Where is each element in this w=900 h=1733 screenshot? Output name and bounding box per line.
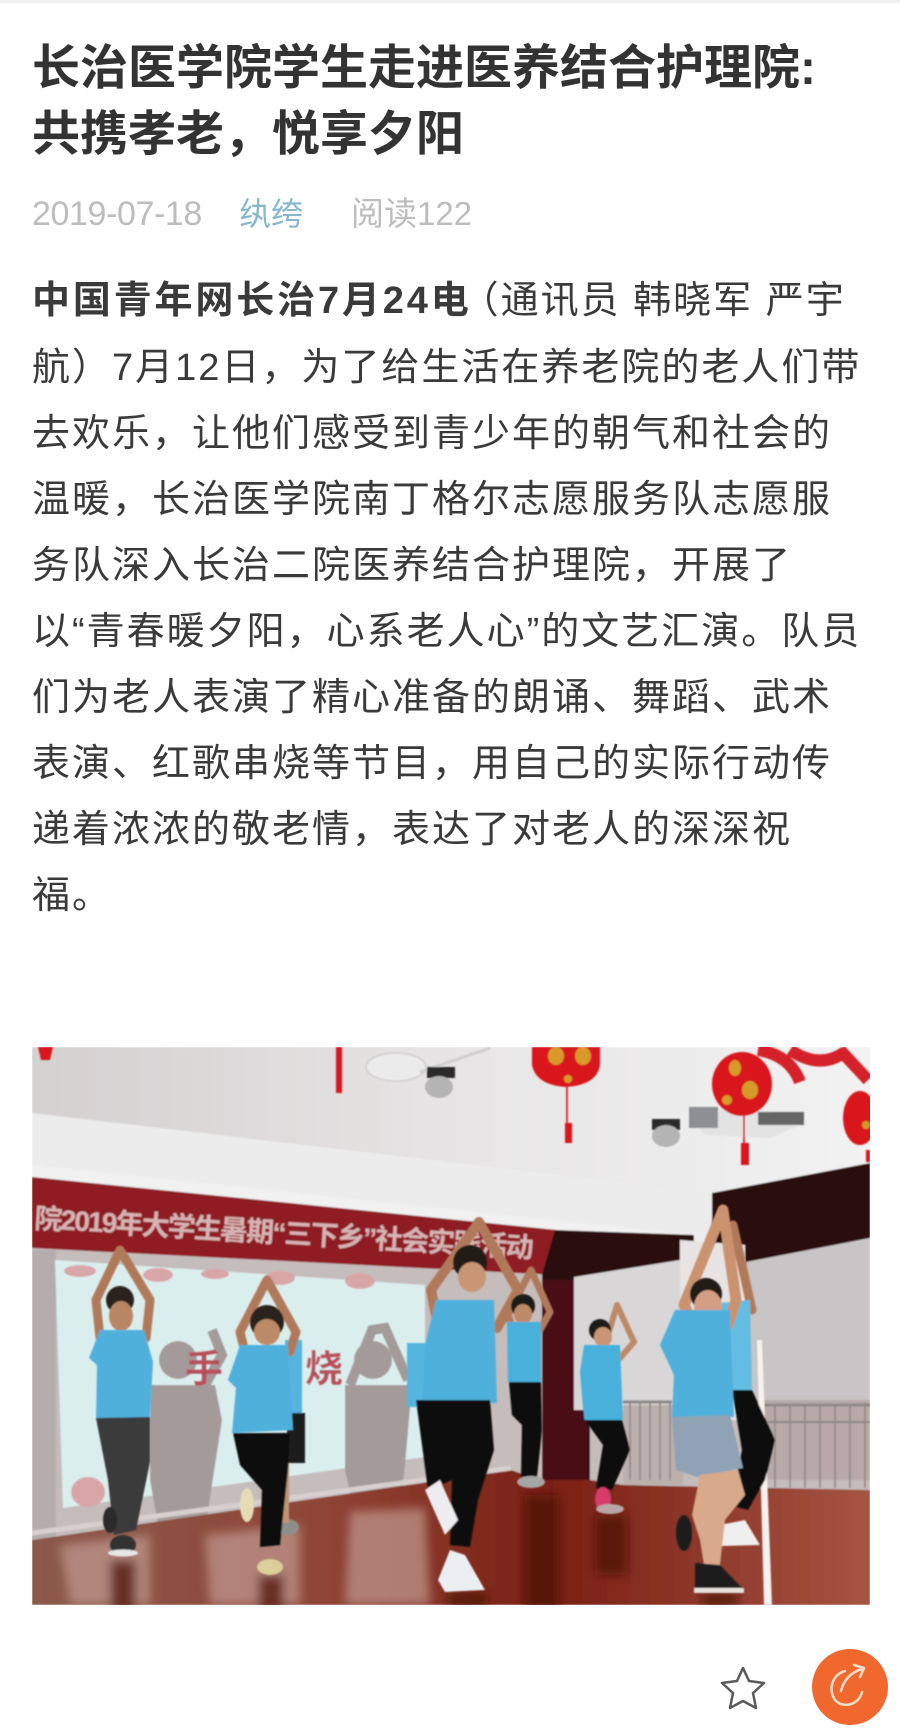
- baseboard: [32, 1468, 511, 1533]
- ceiling: [32, 1047, 870, 1247]
- article body text: 们为老人表演了精心准备的朗诵、舞蹈、武术: [32, 677, 832, 719]
- photo: students dancing on stage: [32, 1047, 870, 1605]
- meta line: [32, 195, 472, 233]
- person 6: [660, 1210, 745, 1593]
- photo: students dancing on stage: 院2019年大学生暑期“三下乡”社会实践活动: [34, 1203, 535, 1264]
- icon: orange share button: [812, 1649, 888, 1725]
- title: [32, 42, 816, 161]
- railing: [623, 1402, 870, 1488]
- article body text: [32, 280, 861, 917]
- person 7: [720, 1225, 775, 1546]
- title: 长治医学院学生走进医养结合护理院:: [32, 42, 816, 95]
- photo: students dancing on stage: 烧: [305, 1349, 343, 1391]
- silhouettes: [150, 1341, 412, 1535]
- article body text: 表演、红歌串烧等节目，用自己的实际行动传: [32, 743, 832, 785]
- article body text: 航）7月12日，为了给生活在养老院的老人们带: [32, 347, 861, 389]
- side panels: [574, 1260, 680, 1410]
- author: 纨绔: [239, 196, 303, 232]
- beam: [32, 1113, 712, 1235]
- date: 2019-07-18: [32, 195, 202, 233]
- person 1: [89, 1250, 153, 1556]
- article body text: 务队深入长治二院医养结合护理院，开展了: [32, 545, 792, 587]
- article body text: 去欢乐，让他们感受到青少年的朝气和社会的: [32, 413, 832, 455]
- article body text: 福。: [32, 875, 112, 917]
- decorative flowers on screen: [64, 1265, 375, 1507]
- read count: 阅读122: [351, 195, 472, 232]
- person 2: [228, 1280, 305, 1575]
- person 3: [407, 1222, 518, 1592]
- ceiling fixtures: [366, 1053, 426, 1081]
- floor: [32, 1470, 870, 1605]
- screen text: 手: [185, 1349, 223, 1391]
- wall: [32, 1245, 870, 1545]
- red ribbon: [758, 1050, 868, 1082]
- title: 共携孝老，悦享夕阳: [32, 108, 464, 161]
- article body text: 以“青春暖夕阳，心系老人心”的文艺汇演。队员: [32, 611, 861, 653]
- article body text: 递着浓浓的敬老情，表达了对老人的深深祝: [32, 809, 792, 851]
- article body text: 温暖，长治医学院南丁格尔志愿服务队志愿服: [32, 479, 832, 521]
- article body text: 中国青年网长治7月24电（通讯员 韩晓军 严宇: [32, 280, 846, 322]
- light streak: [757, 1340, 772, 1605]
- person 4: [507, 1270, 550, 1488]
- projection screen: [55, 1260, 425, 1508]
- person 5: [580, 1305, 634, 1514]
- icon: favourite star: [720, 1666, 766, 1710]
- curtains: [542, 1230, 694, 1480]
- banner: [32, 1177, 557, 1275]
- floor reflections: [60, 1495, 738, 1610]
- lanterns: [38, 1047, 877, 1165]
